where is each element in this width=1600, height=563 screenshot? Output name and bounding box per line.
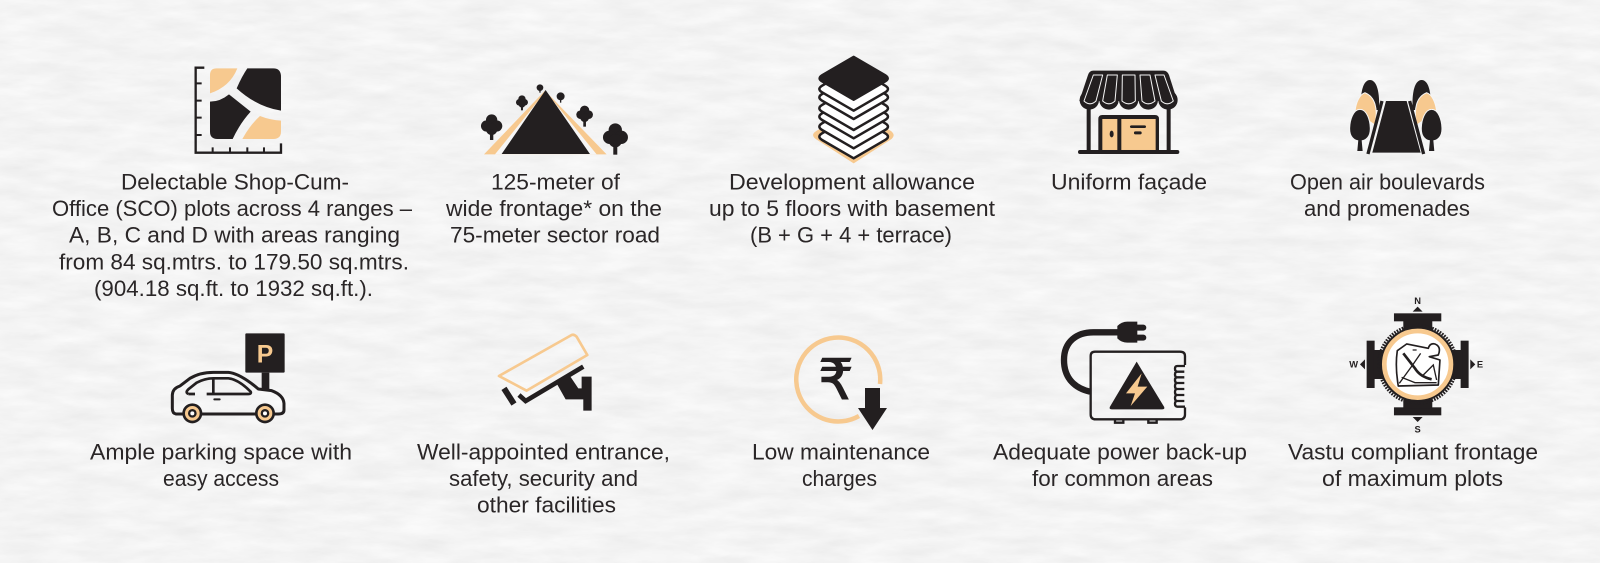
item: floors <box>709 57 995 248</box>
text: frontage: 125-meter of <box>491 169 621 194</box>
text: vastu: Vastu compliant frontage <box>1288 439 1538 464</box>
text: boulevards <box>1290 169 1485 221</box>
icon: storefront <box>1078 71 1179 154</box>
text: security: Well-appointed entrance, <box>417 439 670 464</box>
text: power: Adequate power back-up <box>993 439 1247 464</box>
icon: CCTV camera <box>499 335 592 411</box>
text: parking <box>90 439 352 491</box>
text: facade: Uniform façade <box>1051 169 1207 194</box>
icon: power backup <box>1064 322 1185 423</box>
text: power: for common areas <box>1032 466 1213 491</box>
text: security: other facilities <box>477 492 616 518</box>
item: boulevards <box>1290 80 1485 221</box>
icon: car with parking sign: P <box>257 342 273 369</box>
text: floors: up to 5 floors with basement <box>709 196 995 221</box>
item: power <box>993 322 1247 491</box>
item: SCO plots <box>52 68 413 301</box>
item: parking <box>90 333 352 491</box>
text: security <box>417 439 670 518</box>
text: floors: Development allowance <box>729 169 975 194</box>
icon: road and trees <box>481 84 628 155</box>
text: SCO plots: from 84 sq.mtrs. to 179.50 sq.mtrs. <box>59 249 409 274</box>
text: security: safety, security and <box>449 466 638 491</box>
icon: vastu compass <box>1349 296 1483 435</box>
text: frontage: 75-meter sector road <box>450 223 660 248</box>
icon: vastu compass: S <box>1415 425 1421 435</box>
icon: vastu compass: N <box>1414 296 1421 306</box>
text: boulevards: and promenades <box>1304 196 1470 221</box>
icon: plot map <box>196 68 281 153</box>
item: security <box>417 335 670 518</box>
text: power <box>993 439 1247 491</box>
text: vastu <box>1288 439 1538 491</box>
icon: vastu compass: E <box>1477 360 1483 370</box>
text: SCO plots: Delectable Shop-Cum- <box>121 169 349 194</box>
item: facade <box>1051 71 1207 194</box>
text: floors: (B + G + 4 + terrace) <box>750 223 952 248</box>
text: vastu: of maximum plots <box>1322 466 1503 491</box>
text: maintenance <box>752 439 930 491</box>
text: frontage: wide frontage* on the <box>445 196 662 221</box>
text: SCO plots <box>52 169 413 301</box>
text: maintenance: Low maintenance <box>752 439 930 464</box>
item: maintenance <box>752 337 930 491</box>
icon: vastu compass: W <box>1349 360 1358 370</box>
icon: stacked floors <box>813 57 894 163</box>
icon: rupee with down arrow <box>796 337 887 430</box>
item: frontage <box>445 84 662 248</box>
text: SCO plots: Office (SCO) plots across 4 ranges – <box>52 196 413 221</box>
text: SCO plots: (904.18 sq.ft. to 1932 sq.ft.). <box>94 276 373 301</box>
icon: rupee with down arrow: ₹ <box>818 348 854 413</box>
text: parking: easy access <box>163 466 279 491</box>
text: boulevards: Open air boulevards <box>1290 169 1485 194</box>
text: SCO plots: A, B, C and D with areas ranging <box>69 223 400 248</box>
text: maintenance: charges <box>802 466 877 491</box>
item: vastu <box>1288 296 1538 491</box>
text: parking: Ample parking space with <box>90 439 352 464</box>
text: frontage <box>445 169 662 248</box>
icon: boulevard and trees <box>1350 80 1442 154</box>
text: floors <box>709 169 995 248</box>
icon: car with parking sign <box>172 333 285 423</box>
